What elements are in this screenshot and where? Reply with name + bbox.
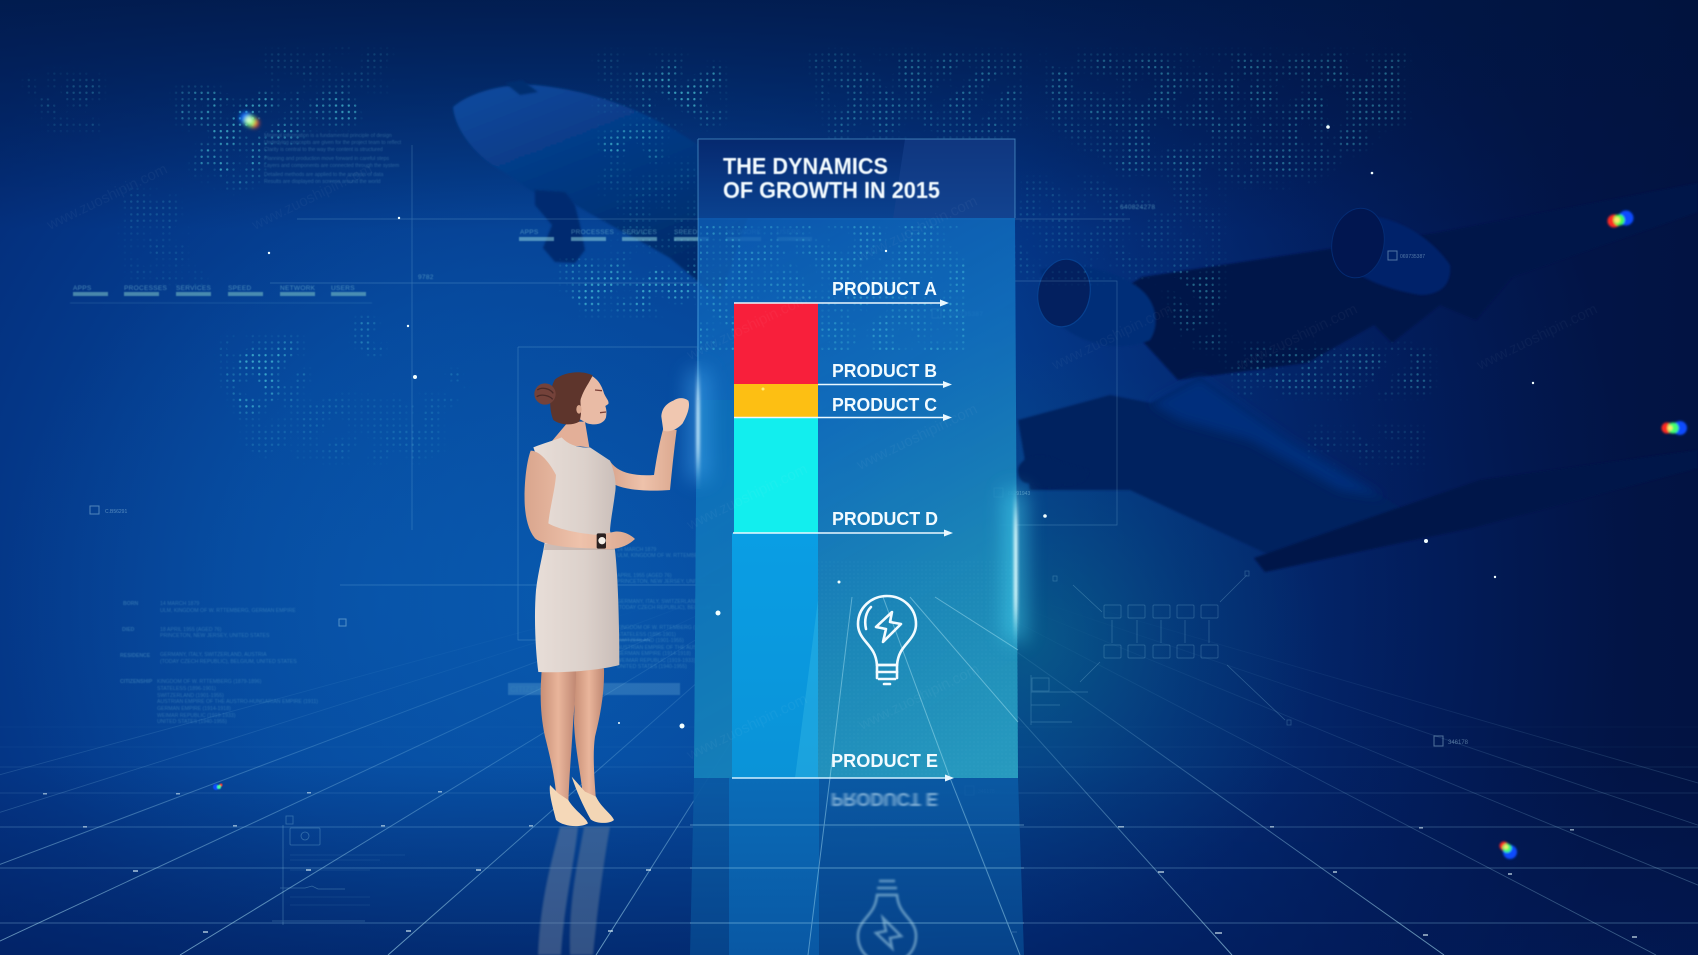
watermark text: www.zuoshipin.com xyxy=(683,461,810,534)
hud: biography table behind presenter: (TODAY CZECH REPUBLIC), BELGIUM xyxy=(617,605,711,611)
product B label xyxy=(818,360,952,388)
reflected bulb icon xyxy=(858,881,916,955)
product C label: PRODUCT C xyxy=(832,394,937,415)
hud: paragraph upper left: Results are displayed on screens around the world xyxy=(264,179,381,185)
hud: metric bars left: SERVICES xyxy=(176,285,212,292)
hud: biography table: WEIMAR REPUBLIC (1919-1933) xyxy=(157,713,236,719)
bar: product C to D xyxy=(734,417,818,533)
flare right xyxy=(1662,421,1687,435)
hud: paragraph upper left: Clarity is central to the way the content is structured xyxy=(264,147,383,153)
hud: biography table: 18 APRIL 1955 (AGED 76) xyxy=(160,627,222,633)
watermark text: www.zuoshipin.com xyxy=(248,161,375,234)
watermark text: www.zuoshipin.com xyxy=(1473,301,1600,374)
title: OF GROWTH IN 2015 xyxy=(723,177,940,203)
hud: biography table behind presenter: KINGDOM OF W. RTTEMBERG (1879) xyxy=(617,625,709,631)
hud: biography table: 14 MARCH 1879 xyxy=(160,601,199,607)
floor reflection of panel xyxy=(690,778,1024,955)
panel grid rays xyxy=(830,597,1018,778)
product A label xyxy=(734,278,949,306)
hud: biography table behind presenter xyxy=(508,547,711,695)
hud: biography table: RESIDENCE xyxy=(120,653,151,659)
bar: product E xyxy=(732,533,818,778)
watermark text: www.zuoshipin.com xyxy=(853,401,980,474)
presenter: rear shoe xyxy=(572,777,614,823)
hud: biography table: KINGDOM OF W. RTTEMBERG (1879-1896) xyxy=(157,679,262,685)
hud: small square markers: 86291943 xyxy=(1008,491,1030,497)
hud: metric bars left xyxy=(70,285,372,303)
hud: biography table behind presenter: ULM, KINGDOM OF W. RTTEMBERG xyxy=(617,553,706,559)
hud: biography table behind presenter: SWITZERLAND (1901-1955) xyxy=(617,638,684,644)
product E label xyxy=(732,750,954,782)
header xyxy=(698,139,1015,218)
hud: biography table behind presenter: STATELESS (1896-1901) xyxy=(617,632,676,638)
hud: metric bars centre: SPEED xyxy=(674,229,698,236)
watermark text: www.zuoshipin.com xyxy=(683,291,810,364)
header lighter facet xyxy=(893,139,1015,218)
presenter: bun xyxy=(534,383,556,405)
hud: biography table behind presenter: PRINCETON, NEW JERSEY, UNITED xyxy=(617,579,706,585)
product E label: PRODUCT E xyxy=(831,750,938,771)
dotted world map xyxy=(28,47,1432,465)
presenter reflection legs xyxy=(538,827,610,955)
rear landing gear xyxy=(1018,456,1088,488)
presenter: dress belt shadow xyxy=(544,544,615,550)
presenter: dress xyxy=(533,437,619,672)
hud: biography table: DIED xyxy=(122,627,135,633)
reflected product E label: PRODUCT E xyxy=(831,789,938,810)
presenter xyxy=(525,372,689,826)
presenter: front shoe xyxy=(550,785,588,826)
hud: paragraph upper left xyxy=(264,133,402,185)
hud: biography table xyxy=(120,601,318,725)
hud: metric bars centre: NETWORK xyxy=(726,229,762,236)
panel outline xyxy=(698,139,1015,400)
presenter: ear xyxy=(576,405,582,414)
hud: code labels: 640824278 xyxy=(1120,204,1155,211)
watermark text: www.zuoshipin.com xyxy=(683,691,810,764)
hud: metric bars left: APPS xyxy=(73,285,92,292)
floor intersection marks xyxy=(43,791,1637,938)
hud: small square markers xyxy=(90,251,1469,795)
flare lower right xyxy=(1500,842,1517,859)
presenter: neck xyxy=(550,422,589,447)
hud: small square markers: 069735387 xyxy=(1400,254,1425,260)
main wing xyxy=(1105,183,1698,380)
flare top right xyxy=(1608,210,1634,228)
presenter: lower arm xyxy=(525,451,635,549)
fuselage xyxy=(1018,377,1420,555)
hud: biography table behind presenter: 14 MARCH 1879 xyxy=(617,547,656,553)
hud: metric bars left: PROCESSES xyxy=(124,285,168,292)
presenter: front leg xyxy=(541,670,576,803)
hud: folder diagram xyxy=(1053,571,1291,725)
hud: paragraph upper left: Planning and production move forward in careful steps xyxy=(264,156,390,162)
presenter: face xyxy=(572,374,609,424)
hud: biography table behind presenter: GERMANY, ITALY, SWITZERLAND xyxy=(617,599,699,605)
title: THE DYNAMICS xyxy=(723,153,888,179)
hud: biography table: ULM, KINGDOM OF W. RTTEMBERG, GERMAN EMPIRE xyxy=(160,608,296,614)
presenter: raised arm xyxy=(609,428,677,491)
hud: code labels: 059735387 xyxy=(948,311,983,318)
hud: biography table behind presenter: GERMAN EMPIRE (1914-1918) xyxy=(617,651,691,657)
watermark text: www.zuoshipin.com xyxy=(1048,301,1175,374)
hud: biography table: AUSTRIAN EMPIRE OF THE AUSTRO-HUNGARIAN EMPIRE (1911) xyxy=(157,699,318,705)
watermark text: www.zuoshipin.com xyxy=(43,161,170,234)
bar: product A xyxy=(734,303,818,384)
hud: metric bars centre xyxy=(519,229,812,241)
tail plane xyxy=(1254,450,1698,572)
lens flares xyxy=(213,112,1687,859)
panel body xyxy=(694,218,1018,778)
hud: biography table: BORN xyxy=(123,601,139,607)
fuselage highlight xyxy=(1151,377,1383,497)
title xyxy=(723,153,940,203)
hud: metric bars left: SPEED xyxy=(228,285,252,292)
engine left xyxy=(1040,266,1156,346)
hud: biography table behind presenter: UNITED STATES (1940-1955) xyxy=(617,664,687,670)
light particles xyxy=(268,125,1534,728)
hud: metric bars left: USERS xyxy=(331,285,355,292)
hud: biography table behind presenter: WEIMAR REPUBLIC (1919-1933) xyxy=(617,658,696,664)
hud: metric bars centre: PROCESSES xyxy=(571,229,615,236)
presenter: brow and lips xyxy=(595,390,606,413)
hud: paragraph upper left: Underlying concepts are given for the project team to reflect xyxy=(264,140,402,146)
product D label xyxy=(733,508,953,536)
hud: paragraph upper left: Layers and components are connected through the system xyxy=(264,163,399,169)
hud: media widget lower left xyxy=(272,816,405,925)
hud: biography table: STATELESS (1896-1901) xyxy=(157,686,216,692)
hud: metric bars centre: SERVICES xyxy=(622,229,658,236)
landing gear xyxy=(535,190,585,263)
hud: paragraph upper left: Detailed methods are applied to the analysis of data xyxy=(264,172,384,178)
product C label xyxy=(734,394,952,421)
panel left strip tint xyxy=(694,400,733,778)
hud: biography table behind presenter: APRIL 1955 (AGED 76) xyxy=(617,573,672,579)
presenter: hair xyxy=(550,372,593,424)
hud: paragraph upper left: Minimal information is a fundamental principle of design xyxy=(264,133,392,139)
hud: biography table behind presenter: CITIZENSHIP xyxy=(510,685,560,694)
airplane silhouette xyxy=(453,80,1698,572)
hud: code labels: 9782 xyxy=(418,274,434,281)
icon: light bulb xyxy=(858,596,916,684)
hud: biography table behind presenter: AUSTRIAN EMPIRE OF THE AUSTRO xyxy=(617,645,708,651)
engine right xyxy=(1340,215,1450,295)
presenter: rear leg xyxy=(574,668,604,800)
product D label: PRODUCT D xyxy=(832,508,938,529)
hud: device icon right of panel xyxy=(1031,675,1088,725)
product B label: PRODUCT B xyxy=(832,360,937,381)
watermark text: www.zuoshipin.com xyxy=(853,193,980,266)
hud: small square markers: C.B56291 xyxy=(105,509,127,515)
hud: biography table: SWITZERLAND (1901-1955) xyxy=(157,693,224,699)
hud: biography table: PRINCETON, NEW JERSEY, UNITED STATES xyxy=(160,633,270,639)
presenter: hand xyxy=(661,398,689,431)
cockpit window xyxy=(505,80,538,95)
panel edge glows xyxy=(688,370,1025,640)
hud: biography table: GERMAN EMPIRE (1914-1918) xyxy=(157,706,231,712)
flare bottom left xyxy=(213,784,222,790)
hud: small square markers: 346178 xyxy=(1448,740,1469,746)
hud: small square markers: 346178 xyxy=(978,789,995,795)
hud: biography table: UNITED STATES (1940-1955) xyxy=(157,719,227,725)
watermark text: www.zuoshipin.com xyxy=(1233,301,1360,374)
stacked bar chart xyxy=(732,303,818,778)
dots seen through panel xyxy=(700,225,965,350)
flare top left xyxy=(240,112,259,128)
floor grid across reflection xyxy=(690,778,1024,955)
hud: frame lines xyxy=(270,145,1130,640)
hud: biography table: (TODAY CZECH REPUBLIC), BELGIUM, UNITED STATES xyxy=(160,659,297,665)
perspective floor grid xyxy=(0,540,1698,955)
bar: product B xyxy=(734,384,818,417)
presenter: wristwatch xyxy=(597,533,606,549)
hud: biography table: CITIZENSHIP xyxy=(120,679,153,685)
hud: code labels xyxy=(418,204,1155,318)
airplane nose xyxy=(453,85,760,300)
hud: metric bars centre: APPS xyxy=(520,229,539,236)
panel xyxy=(694,139,1018,782)
product A label: PRODUCT A xyxy=(832,278,937,299)
panel fine grid xyxy=(818,560,1018,778)
watermark text xyxy=(43,161,1600,764)
hud: metric bars centre: USERS xyxy=(777,229,801,236)
hud: biography table: GERMANY, ITALY, SWITZERLAND, AUSTRIA xyxy=(160,652,267,658)
watermark text: www.zuoshipin.com xyxy=(855,661,982,734)
hud: metric bars left: NETWORK xyxy=(280,285,316,292)
